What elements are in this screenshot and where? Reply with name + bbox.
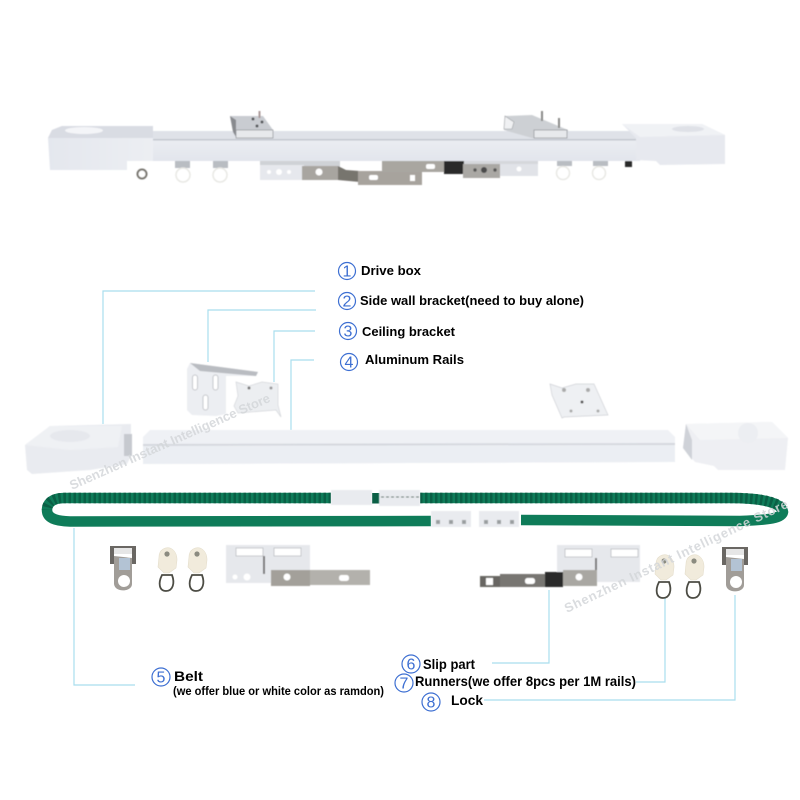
left drive box on assembled track xyxy=(48,126,153,170)
left runners xyxy=(158,548,207,591)
label 4: aluminum rails xyxy=(340,352,464,372)
label 1: drive box xyxy=(338,262,422,280)
label 5: belt xyxy=(152,668,384,698)
ceiling bracket right xyxy=(550,384,608,418)
label 8: lock xyxy=(422,692,483,712)
label 3: ceiling bracket: 3 xyxy=(344,324,353,340)
label 5: belt: 5 xyxy=(157,670,166,686)
right slip part on assembled track xyxy=(382,159,538,178)
assembled curtain track xyxy=(48,111,725,185)
right drive box xyxy=(683,422,788,470)
left lock xyxy=(110,546,136,590)
watermark right: Shenzhen Instant Intelligence Store xyxy=(562,496,790,616)
label 6: slip part xyxy=(402,655,475,674)
label 3: ceiling bracket: Ceiling bracket xyxy=(362,324,456,339)
right drive box on assembled track xyxy=(622,124,725,165)
leader lines xyxy=(74,291,735,700)
label 5: belt: (we offer blue or white color as ramdon) xyxy=(173,684,384,698)
aluminum rail xyxy=(143,430,675,464)
rail of assembled track xyxy=(150,131,640,161)
label 7: runners: Runners(we offer 8pcs per 1M rails) xyxy=(415,673,636,689)
label 3: ceiling bracket xyxy=(340,322,456,340)
right runners xyxy=(655,555,704,598)
left top bracket xyxy=(230,111,273,138)
right lock xyxy=(722,547,748,591)
label 8: lock: 8 xyxy=(427,694,436,712)
label 1: drive box: Drive box xyxy=(361,263,422,278)
label 4: aluminum rails: 4 xyxy=(345,354,354,372)
label 7: runners: 7 xyxy=(400,676,409,692)
label 2: side wall bracket: Side wall bracket(need to buy alone) xyxy=(360,293,584,308)
side wall bracket xyxy=(187,363,258,416)
ceiling bracket left xyxy=(234,382,281,417)
right top bracket xyxy=(504,111,568,138)
label 5: belt: Belt xyxy=(174,668,203,684)
label 1: drive box: 1 xyxy=(343,264,352,280)
label 2: side wall bracket: 2 xyxy=(343,294,352,310)
label 6: slip part: 6 xyxy=(407,656,416,674)
right slip part xyxy=(480,545,640,587)
left slip part on assembled track xyxy=(260,161,422,185)
left runners on assembled track xyxy=(138,161,228,182)
watermark left: Shenzhen Instant Intelligence Store xyxy=(67,390,272,493)
green belt xyxy=(47,493,783,522)
belt clips xyxy=(331,490,519,527)
label 4: aluminum rails: Aluminum Rails xyxy=(365,352,464,367)
label 8: lock: Lock xyxy=(451,692,483,708)
left drive box xyxy=(25,424,132,474)
right runners on assembled track xyxy=(556,158,632,180)
left slip part xyxy=(226,545,370,586)
label 6: slip part: Slip part xyxy=(423,656,475,672)
